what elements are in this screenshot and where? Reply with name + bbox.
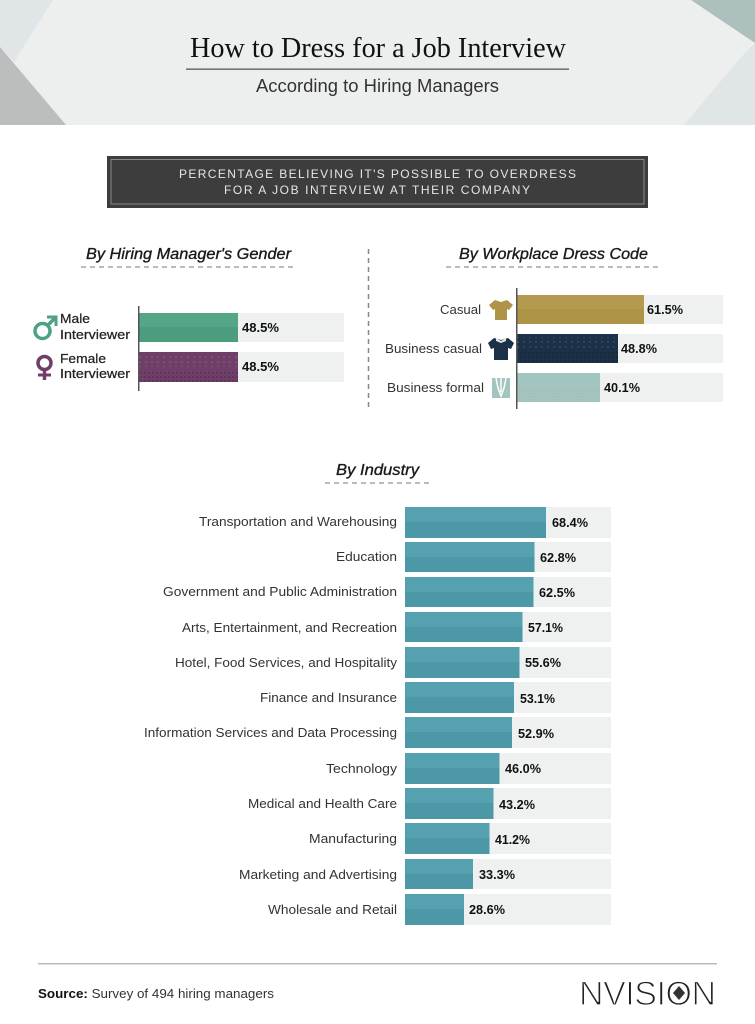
row: wholesale: 28.6% <box>469 903 505 917</box>
row: finance <box>260 682 611 713</box>
row: manufacturing <box>309 823 611 854</box>
row: government: 62.5% <box>539 586 575 600</box>
row: government: Government and Public Administration <box>163 584 397 599</box>
chart: by gender <box>138 306 344 391</box>
banner: question <box>107 156 648 208</box>
row: medical: Medical and Health Care <box>248 796 397 811</box>
label: female: Interviewer <box>60 366 131 381</box>
chart: by gender: 48.5% <box>242 321 279 335</box>
bar: male <box>139 313 238 342</box>
icon: female symbol <box>38 356 51 380</box>
heading: by gender: By Hiring Manager's Gender <box>86 246 292 263</box>
row: arts <box>182 612 611 642</box>
banner: question: PERCENTAGE BELIEVING IT'S POSSIBLE TO OVERDRESS <box>179 167 576 181</box>
icon: blouse <box>488 338 514 360</box>
label: business casual: Business casual <box>385 341 482 356</box>
icon: suit <box>492 378 510 398</box>
row: education: 62.8% <box>540 551 576 565</box>
row: transportation: Transportation and Warehousing <box>199 514 397 529</box>
row: transportation <box>199 507 611 538</box>
header banner <box>0 0 755 125</box>
label: female: Female <box>60 351 106 366</box>
row: marketing <box>239 859 611 889</box>
row: marketing: 33.3% <box>479 868 515 882</box>
chart: by dress code: 48.8% <box>621 342 657 356</box>
row: finance: Finance and Insurance <box>260 690 397 705</box>
label: male: Interviewer <box>60 327 131 342</box>
bar: casual <box>517 295 644 324</box>
title: How to Dress for a Job Interview <box>190 32 566 64</box>
row: technology: Technology <box>326 761 398 776</box>
row: hotel: Hotel, Food Services, and Hospitality <box>175 655 398 670</box>
row: information <box>144 717 611 748</box>
chart: by dress code: 40.1% <box>604 381 640 395</box>
row: information: 52.9% <box>518 727 554 741</box>
label: male <box>60 311 131 342</box>
chart: by dress code: 61.5% <box>647 303 683 317</box>
row: marketing: Marketing and Advertising <box>239 867 397 882</box>
label: business formal: Business formal <box>387 380 484 395</box>
row: government <box>163 577 611 607</box>
row: education: Education <box>336 549 397 564</box>
row: arts: Arts, Entertainment, and Recreation <box>182 620 397 635</box>
row: information: Information Services and Data Processing <box>144 725 397 740</box>
row: medical <box>248 788 611 819</box>
icon: t-shirt <box>489 300 513 320</box>
bar: business casual <box>517 334 618 363</box>
row: education <box>336 542 611 572</box>
row: hotel: 55.6% <box>525 656 561 670</box>
heading: by industry: By Industry <box>336 462 420 479</box>
logo: NVISION: NVISION <box>579 975 716 1013</box>
row: hotel <box>175 647 611 678</box>
banner: question: FOR A JOB INTERVIEW AT THEIR COMPANY <box>224 183 530 197</box>
heading: by dress code: By Workplace Dress Code <box>459 246 648 263</box>
title rule <box>186 68 569 70</box>
source note: Source: Survey of 494 hiring managers <box>38 986 275 1001</box>
row: technology: 46.0% <box>505 762 541 776</box>
row: transportation: 68.4% <box>552 516 588 530</box>
chart: by gender: 48.5% <box>242 360 279 374</box>
bar: business formal <box>517 373 600 402</box>
row: arts: 57.1% <box>528 621 563 635</box>
row: wholesale <box>268 894 611 925</box>
row: finance: 53.1% <box>520 692 555 706</box>
chart: by industry <box>144 507 611 925</box>
icon: male symbol <box>35 317 56 338</box>
chart: by dress code <box>516 288 723 409</box>
bar: female <box>139 352 238 382</box>
label: casual: Casual <box>440 302 481 317</box>
row: technology <box>326 753 611 784</box>
label: female <box>60 351 131 381</box>
heading: by industry <box>325 462 431 483</box>
row: manufacturing: 41.2% <box>495 833 530 847</box>
row: manufacturing: Manufacturing <box>309 831 397 846</box>
label: male: Male <box>60 311 90 326</box>
row: wholesale: Wholesale and Retail <box>268 902 397 917</box>
row: medical: 43.2% <box>499 798 535 812</box>
subtitle: According to Hiring Managers <box>256 75 499 96</box>
